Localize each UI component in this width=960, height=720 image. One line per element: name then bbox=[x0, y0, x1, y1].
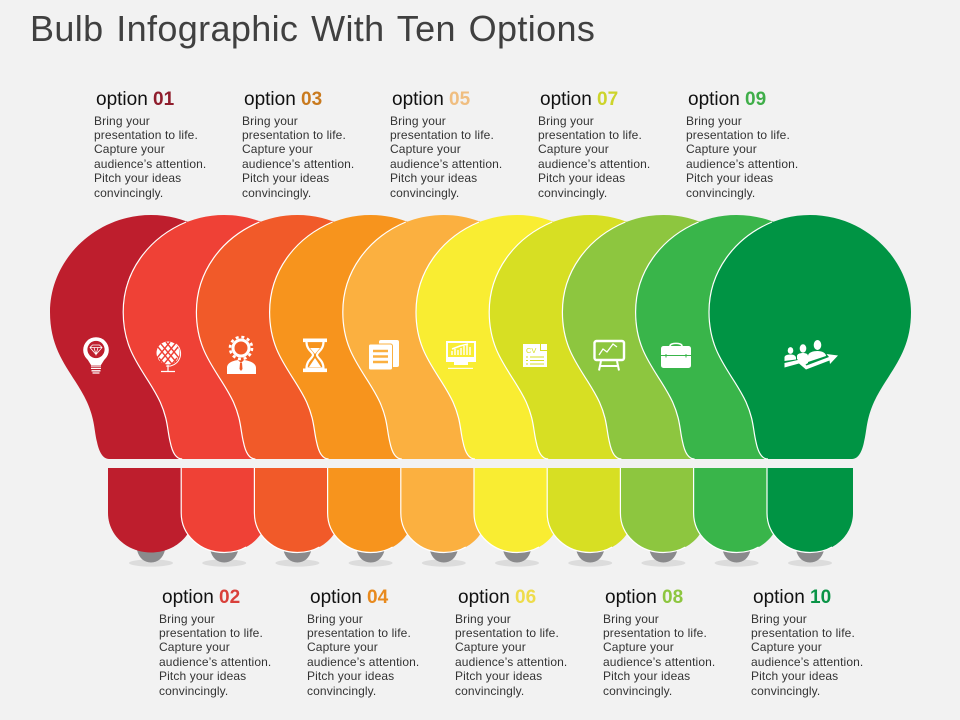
icon: CV sheet bbox=[523, 344, 547, 367]
text: option 06: presentation to life. bbox=[455, 626, 559, 640]
text: option 06: Pitch your ideas bbox=[455, 669, 542, 683]
text: option 01: convincingly. bbox=[94, 186, 163, 200]
text: option 08 bbox=[603, 587, 715, 698]
text: option 02: presentation to life. bbox=[159, 626, 263, 640]
text: option 09: Pitch your ideas bbox=[686, 171, 773, 185]
text: option 07 bbox=[538, 89, 650, 200]
bulb 10 bbox=[709, 215, 911, 567]
text: option 04: audience’s attention. bbox=[307, 655, 419, 669]
text: option 08: Capture your bbox=[603, 640, 674, 654]
text: option 02: convincingly. bbox=[159, 684, 228, 698]
text: option 05: Bring your bbox=[390, 114, 446, 128]
text: option 07: Pitch your ideas bbox=[538, 171, 625, 185]
text: option 06: Capture your bbox=[455, 640, 526, 654]
text: option 02: Capture your bbox=[159, 640, 230, 654]
icon: monitor with chart bbox=[447, 342, 475, 369]
text: option 02: audience’s attention. bbox=[159, 655, 271, 669]
text: option 04: presentation to life. bbox=[307, 626, 411, 640]
text: option 09: Bring your bbox=[686, 114, 742, 128]
bulb 02 bbox=[123, 215, 325, 567]
bulb 05 bbox=[343, 215, 545, 567]
text: option 01: option 01 bbox=[96, 89, 174, 110]
text: option 05 bbox=[390, 89, 502, 200]
text: option 01: audience’s attention. bbox=[94, 157, 206, 171]
text: option 04: Capture your bbox=[307, 640, 378, 654]
text: option 10 bbox=[751, 587, 863, 698]
text: option 03: audience’s attention. bbox=[242, 157, 354, 171]
text: option 09 bbox=[686, 89, 798, 200]
text: option 03: presentation to life. bbox=[242, 128, 346, 142]
text: option 10: Pitch your ideas bbox=[751, 669, 838, 683]
text: option 05: Pitch your ideas bbox=[390, 171, 477, 185]
text: option 06: Bring your bbox=[455, 612, 511, 626]
text: option 10: Capture your bbox=[751, 640, 822, 654]
text: option 09: presentation to life. bbox=[686, 128, 790, 142]
text: option 10: convincingly. bbox=[751, 684, 820, 698]
text: option 02 bbox=[159, 587, 271, 698]
text: option 01: presentation to life. bbox=[94, 128, 198, 142]
text: option 05: audience’s attention. bbox=[390, 157, 502, 171]
text: option 06: option 06 bbox=[458, 587, 536, 608]
text: option 10: audience’s attention. bbox=[751, 655, 863, 669]
text: option 07: convincingly. bbox=[538, 186, 607, 200]
icon: presentation board bbox=[594, 341, 624, 370]
bulb 04 bbox=[270, 215, 472, 567]
text: option 06 bbox=[455, 587, 567, 698]
bulb 07 bbox=[489, 215, 691, 567]
icon: team with arrow bbox=[784, 340, 838, 370]
text: option 03: Capture your bbox=[242, 142, 313, 156]
text: option 09: convincingly. bbox=[686, 186, 755, 200]
text: option 03: Pitch your ideas bbox=[242, 171, 329, 185]
text: option 10: presentation to life. bbox=[751, 626, 855, 640]
icon: light bulb with diamond bbox=[83, 337, 109, 373]
text: option 04: convincingly. bbox=[307, 684, 376, 698]
text: option 09: audience’s attention. bbox=[686, 157, 798, 171]
text: option 08: Pitch your ideas bbox=[603, 669, 690, 683]
icon: globe bbox=[156, 342, 181, 372]
text: option 07: Bring your bbox=[538, 114, 594, 128]
bulb 08 bbox=[562, 215, 764, 567]
icon: briefcase bbox=[661, 343, 691, 368]
text: option 04: Bring your bbox=[307, 612, 363, 626]
text: option 06: audience’s attention. bbox=[455, 655, 567, 669]
bulb 03 bbox=[196, 215, 398, 567]
text: option 03: Bring your bbox=[242, 114, 298, 128]
text: option 10: Bring your bbox=[751, 612, 807, 626]
text: option 01: Capture your bbox=[94, 142, 165, 156]
text: option 07: option 07 bbox=[540, 89, 618, 110]
text: option 04: Pitch your ideas bbox=[307, 669, 394, 683]
text: option 05: Capture your bbox=[390, 142, 461, 156]
text: option 07: Capture your bbox=[538, 142, 609, 156]
text: option 08: Bring your bbox=[603, 612, 659, 626]
text: option 02: option 02 bbox=[162, 587, 240, 608]
text: option 07: audience’s attention. bbox=[538, 157, 650, 171]
text: option 05: convincingly. bbox=[390, 186, 459, 200]
icon: CV sheet: CV bbox=[526, 346, 536, 355]
text: option 03: option 03 bbox=[244, 89, 322, 110]
text: option 10: option 10 bbox=[753, 587, 831, 608]
text: option 08: convincingly. bbox=[603, 684, 672, 698]
text: option 03: convincingly. bbox=[242, 186, 311, 200]
text: option 09: option 09 bbox=[688, 89, 766, 110]
bulb 01 bbox=[50, 215, 252, 567]
text: option 02: Bring your bbox=[159, 612, 215, 626]
text: option 09: Capture your bbox=[686, 142, 757, 156]
icon: hourglass bbox=[303, 338, 327, 372]
text: option 08: presentation to life. bbox=[603, 626, 707, 640]
bulb 06 bbox=[416, 215, 618, 567]
text: option 06: convincingly. bbox=[455, 684, 524, 698]
text: option 05: option 05 bbox=[392, 89, 470, 110]
icon: documents bbox=[368, 340, 399, 370]
text: option 04 bbox=[307, 587, 419, 698]
text: option 05: presentation to life. bbox=[390, 128, 494, 142]
text: option 01: Bring your bbox=[94, 114, 150, 128]
title: Bulb Infographic With Ten Options bbox=[30, 8, 595, 49]
bulb 09 bbox=[636, 215, 838, 567]
text: option 08: option 08 bbox=[605, 587, 683, 608]
text: option 04: option 04 bbox=[310, 587, 388, 608]
text: option 02: Pitch your ideas bbox=[159, 669, 246, 683]
icon: person with gear bbox=[227, 337, 256, 374]
text: option 01: Pitch your ideas bbox=[94, 171, 181, 185]
text: option 08: audience’s attention. bbox=[603, 655, 715, 669]
text: option 03 bbox=[242, 89, 354, 200]
text: option 01 bbox=[94, 89, 206, 200]
text: option 07: presentation to life. bbox=[538, 128, 642, 142]
